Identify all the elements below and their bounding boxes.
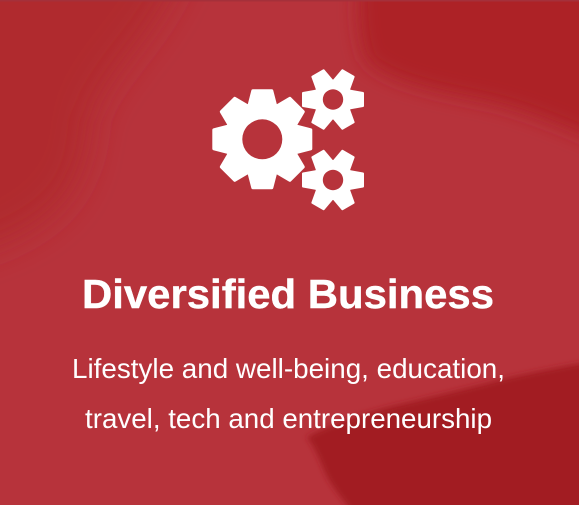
title: Diversified Business bbox=[82, 271, 494, 317]
icon: lower small gear bbox=[303, 150, 363, 210]
icon: gears bbox=[214, 69, 363, 210]
description text bbox=[72, 353, 505, 434]
icon: upper small gear bbox=[303, 69, 363, 130]
description line 2: travel, tech and entrepreneurship bbox=[85, 403, 492, 434]
description line 1: Lifestyle and well-being, education, bbox=[72, 353, 505, 384]
icon: large gear bbox=[214, 91, 311, 188]
